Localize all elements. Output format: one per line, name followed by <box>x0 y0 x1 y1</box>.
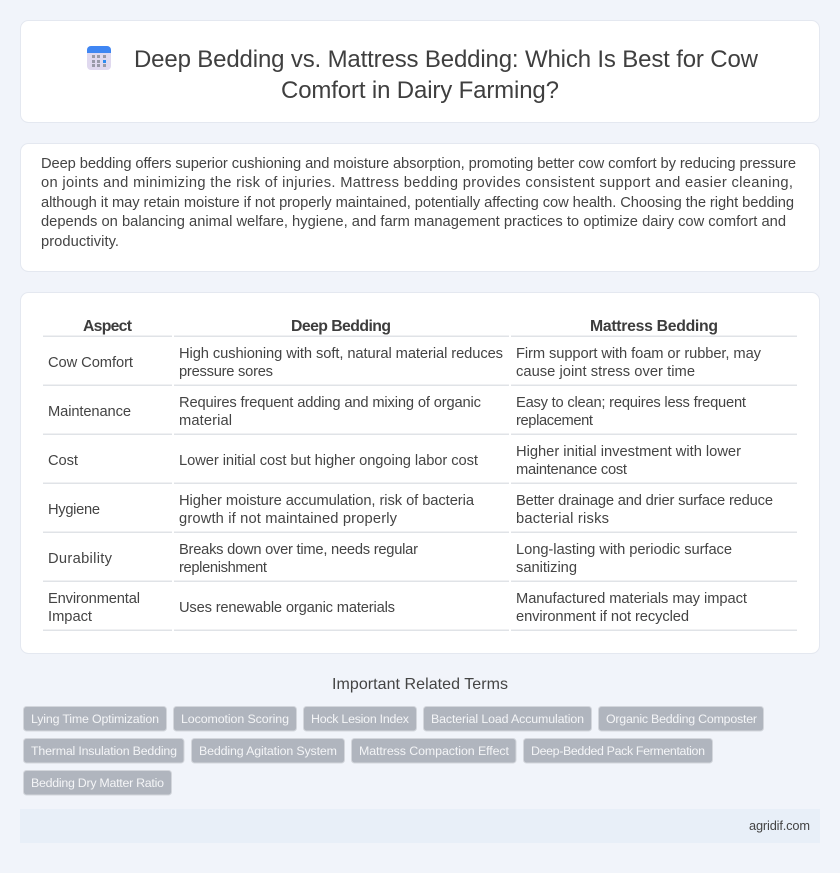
row: cow comfort: Firm support with foam or rubber, may <box>516 346 762 362</box>
title <box>134 46 759 104</box>
row: environmental impact: Uses renewable organic materials <box>179 600 395 616</box>
table header: Mattress Bedding <box>590 318 718 335</box>
tags: related terms: Locomotion Scoring <box>181 712 289 726</box>
row: durability: sanitizing <box>516 560 577 576</box>
row: cow comfort: Cow Comfort <box>48 355 133 371</box>
row: durability: replenishment <box>179 560 267 576</box>
tags: related terms: Bedding Dry Matter Ratio <box>31 776 164 790</box>
tags: related terms: Hock Lesion Index <box>311 712 410 726</box>
row: cost: maintenance cost <box>516 462 627 478</box>
row: environmental impact <box>43 591 797 631</box>
table header: Aspect <box>83 318 133 335</box>
row: durability: Long-lasting with periodic surface <box>516 542 732 558</box>
row: environmental impact: Manufactured materials may impact <box>516 591 747 607</box>
row: maintenance: Maintenance <box>48 404 131 420</box>
row: durability: Durability <box>48 551 113 567</box>
icon: calendar <box>87 46 111 70</box>
text block: description: on joints and minimizing the risk of injuries. Mattress bedding provides consistent support and easier cleaning, <box>41 175 793 191</box>
row: cow comfort <box>43 346 797 386</box>
row: environmental impact: Impact <box>48 609 92 625</box>
row: cost <box>43 444 797 484</box>
table header: Deep Bedding <box>291 318 391 335</box>
tags: related terms: Mattress Compaction Effect <box>359 744 510 758</box>
tags: related terms <box>24 706 764 795</box>
row: maintenance: Easy to clean; requires less frequent <box>516 395 746 411</box>
row: cost: Higher initial investment with lower <box>516 444 741 460</box>
row: hygiene <box>43 493 797 533</box>
footer: agridif.com <box>749 818 810 833</box>
row: hygiene: growth if not maintained properly <box>179 511 398 527</box>
tags: related terms: Lying Time Optimization <box>31 712 159 726</box>
panel: comparison table <box>20 292 820 654</box>
row: cow comfort: pressure sores <box>179 364 273 380</box>
row: cost: Lower initial cost but higher ongoing labor cost <box>179 453 478 469</box>
row: maintenance: Requires frequent adding and mixing of organic <box>179 395 481 411</box>
footer <box>20 809 820 843</box>
heading: important related terms: Important Related Terms <box>332 676 508 693</box>
text block: description: productivity. <box>41 234 119 250</box>
row: environmental impact: Environmental <box>48 591 140 607</box>
panel: title header <box>20 20 820 122</box>
tags: related terms: Deep-Bedded Pack Fermentation <box>531 744 705 758</box>
tags: related terms: Thermal Insulation Bedding <box>31 744 177 758</box>
text block: description: although it may retain moisture if not properly maintained, potentially affecting cow health. Choosing the right bedding <box>41 195 794 211</box>
row: cost: Cost <box>48 453 78 469</box>
row: durability: Breaks down over time, needs regular <box>179 542 418 558</box>
row: environmental impact: environment if not recycled <box>516 609 689 625</box>
row: maintenance <box>43 395 797 435</box>
tags: related terms: Bedding Agitation System <box>199 744 337 758</box>
row: maintenance: replacement <box>516 413 593 429</box>
row: hygiene: Better drainage and drier surface reduce <box>516 493 773 509</box>
title: Comfort in Dairy Farming? <box>281 77 559 104</box>
row: durability <box>43 542 797 582</box>
row: hygiene: bacterial risks <box>516 511 609 527</box>
row: cow comfort: High cushioning with soft, natural material reduces <box>179 346 503 362</box>
tags: related terms: Organic Bedding Composter <box>606 712 757 726</box>
row: hygiene: Higher moisture accumulation, risk of bacteria <box>179 493 475 509</box>
table header <box>43 318 797 337</box>
text block: description: depends on balancing animal welfare, hygiene, and farm management practices to optimize dairy cow comfort and <box>41 214 786 230</box>
row: cow comfort: cause joint stress over time <box>516 364 695 380</box>
tags: related terms: Bacterial Load Accumulation <box>431 712 584 726</box>
row: maintenance: material <box>179 413 232 429</box>
text block: description: Deep bedding offers superior cushioning and moisture absorption, promoting better cow comfort by reducing pressure <box>41 156 796 172</box>
title: Deep Bedding vs. Mattress Bedding: Which Is Best for Cow <box>134 46 759 73</box>
row: hygiene: Hygiene <box>48 502 100 518</box>
text block: description <box>41 156 796 250</box>
panel: description <box>20 144 820 272</box>
